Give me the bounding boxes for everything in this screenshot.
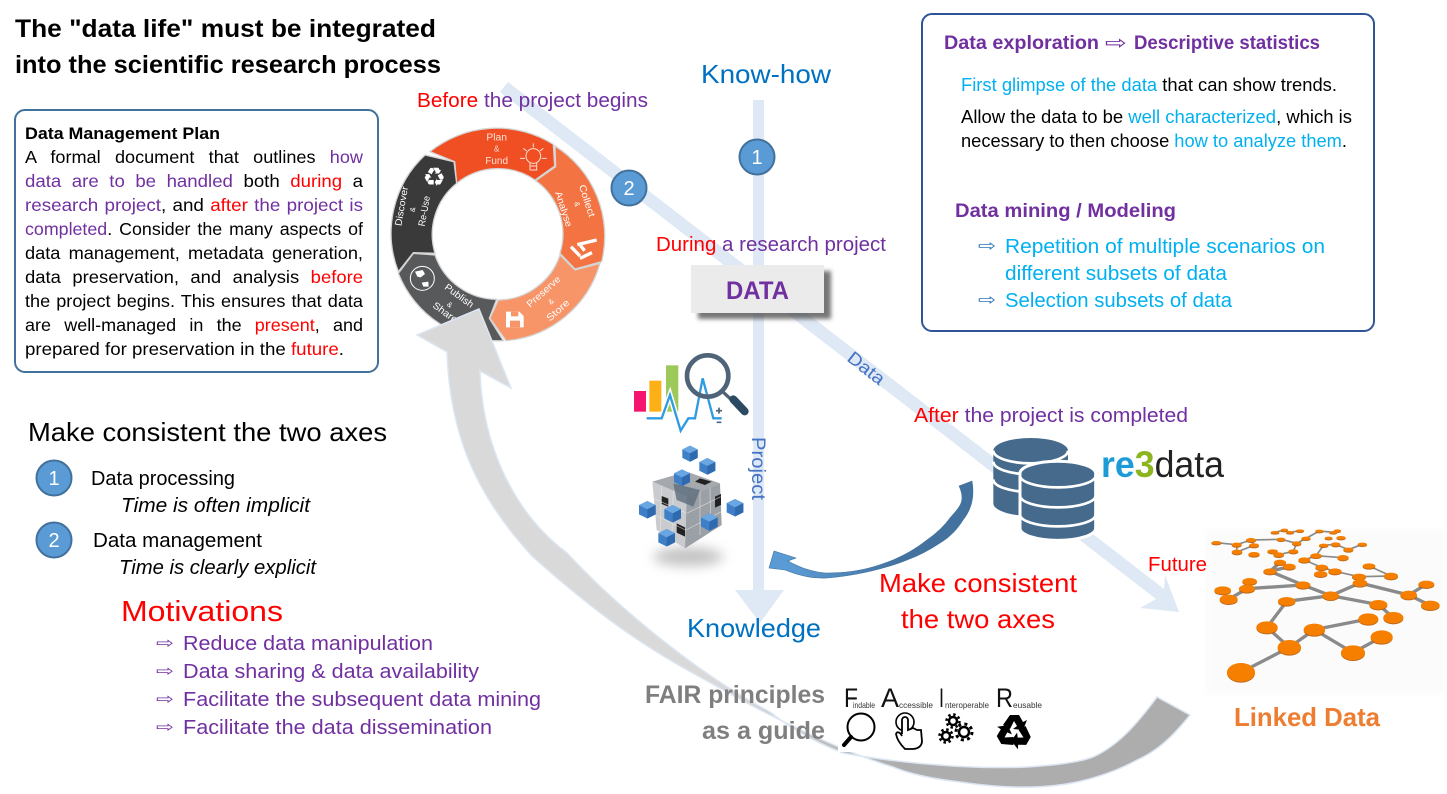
label: know-how: Know-how [701,59,831,89]
findable [844,683,875,745]
icon: database [993,438,1096,540]
icon: analytics chart and magnifier [634,355,745,431]
label: knowledge: Knowledge [687,613,821,643]
fair principles icons [838,683,1045,752]
segment: publish and share: Share [430,300,459,326]
label: data axis: Data [844,347,890,390]
label: before the project begins: Before the project begins [417,90,648,112]
panel text: data management plan: data are to be handled both during a [25,171,363,191]
panel: data exploration and mining [922,14,1374,331]
item 1: data processing: Data processing [91,468,235,490]
list: data mining items: Repetition of multiple scenarios on [1005,235,1325,258]
segment: preserve and store: & [546,296,556,306]
list: motivations: Facilitate the data dissemination [183,717,492,739]
title: into the scientific research process [15,51,441,79]
data box [691,265,824,313]
label: make consistent the two axes: the two axes [901,604,1055,634]
list: motivations: ⇨ [156,634,174,652]
segment: plan and fund [430,128,555,183]
segment: discover and re-use: Re-Use [417,195,433,227]
axis 1 badge: 1 [751,147,763,169]
label: project axis: Project [747,437,768,501]
reusable: R [996,683,1013,713]
segment: discover and re-use: ♻ [423,163,446,193]
segment: preserve and store [490,255,600,341]
segment: plan and fund: Plan [486,133,507,144]
list: data mining items [978,235,1325,312]
segment: preserve and store: Store [544,298,572,324]
label: make consistent the two axes: Make consistent [879,568,1078,598]
label: make consistent the two axes [879,568,1078,634]
findable: indable [853,700,875,710]
panel text: data management plan: prepared for preservation in the future. [25,339,344,359]
heading: data exploration: Descriptive statistics [1134,33,1320,54]
reusable [993,683,1042,752]
axis 2: diagonal data arrow [500,82,1179,612]
logo: re3data: re3data [1101,444,1224,485]
curved blue arrow: database back to project axis [769,481,973,578]
list: motivations [156,633,541,739]
label: after the project is completed: After the project is completed [914,405,1188,427]
list: motivations: Data sharing & data availability [183,661,479,683]
label: during a research project: During a research project [656,234,886,256]
segment: collect and analyse: Analyse [552,190,574,228]
segment: publish and share [398,253,503,341]
text: exploration description: First glimpse of the data that can show trends. [961,75,1337,95]
data lifecycle ring [391,128,605,341]
illustration: linked data network [1207,529,1445,693]
axis 2 badge: 2 [623,178,635,200]
panel text: data management plan: completed. Consider the many aspects of [25,219,363,239]
icon: data cube [639,446,743,566]
heading: data exploration: Data exploration [944,33,1099,54]
segment: plan and fund: Fund [485,156,508,167]
list: motivations: ⇨ [156,662,174,680]
panel text: data management plan: research project , and after the project is [25,195,363,215]
panel text: data management plan: data management, metadata generation, [25,243,363,263]
segment: publish and share: & [445,300,455,310]
segment: collect and analyse: Collect [576,183,597,219]
axis 1 badge [740,140,774,174]
panel text: data management plan: A formal document that outlines how [25,147,363,167]
panel text: data management plan [25,124,363,359]
axis 1: vertical project arrow [735,100,784,623]
item 2: data management: 2 [48,530,60,552]
accessible [881,683,933,749]
label: future: Future [1148,554,1207,576]
list: motivations: ⇨ [156,690,174,708]
interoperable [939,683,989,742]
list: data mining items: different subsets of data [1005,262,1228,285]
list: motivations: Facilitate the subsequent data mining [183,689,541,711]
segment: publish and share: Publish [442,282,476,311]
segment: preserve and store: Preserve [525,274,563,310]
findable: F [844,683,858,713]
heading: data exploration: ⇨ [1105,32,1127,54]
panel text: data management plan: the project begins. This ensures that data [25,291,363,311]
axis 2 badge [612,170,646,206]
accessible: A [881,683,899,713]
segment: discover and re-use [391,155,457,272]
heading: data mining: Data mining / Modeling [955,201,1176,222]
item 2: data management [36,522,317,579]
title [15,15,441,79]
panel text: data management plan: are well-managed in the present, and [25,315,363,335]
list: data mining items: ⇨ [978,290,996,309]
item 2: data management: Time is clearly explicit [119,557,317,579]
fair principles heading [645,681,825,745]
panel text: data management plan: Data Management Plan [25,124,220,143]
panel: data management plan [15,110,378,372]
list: data mining items: ⇨ [978,236,996,255]
accessible: ccessible [899,700,933,710]
text: exploration description: necessary to then choose how to analyze them. [961,131,1347,151]
title: The "data life" must be integrated [15,15,436,43]
segment: collect and analyse [536,146,605,269]
item 1: data processing: 1 [48,468,60,490]
text: exploration description [961,75,1352,151]
list: motivations: ⇨ [156,718,174,736]
item 2: data management: Data management [93,530,262,552]
item 1: data processing [36,460,311,517]
fair principles heading: FAIR principles [645,681,825,709]
segment: plan and fund: & [494,145,500,154]
segment: discover and re-use: & [408,206,417,213]
reusable: eusable [1013,700,1042,710]
interoperable: nteroperable [945,700,989,710]
heading: data exploration [944,32,1320,54]
interoperable: I [939,683,944,713]
segment: discover and re-use: Discover [393,185,411,227]
data box: DATA [726,277,789,305]
label: linked data: Linked Data [1234,702,1381,732]
big grey return arrow [417,309,1190,787]
heading: motivations: Motivations [121,596,283,628]
list: motivations: Reduce data manipulation [183,633,433,655]
segment: collect and analyse: & [572,201,582,208]
heading: make consistent the two axes: Make consistent the two axes [28,417,387,447]
panel text: data management plan: data preservation, and analysis before [25,267,363,287]
text: exploration description: Allow the data to be well characterized, which is [961,107,1352,127]
item 1: data processing: Time is often implicit [121,495,311,517]
fair principles heading: as a guide [702,717,825,745]
list: data mining items: Selection subsets of data [1005,289,1233,312]
